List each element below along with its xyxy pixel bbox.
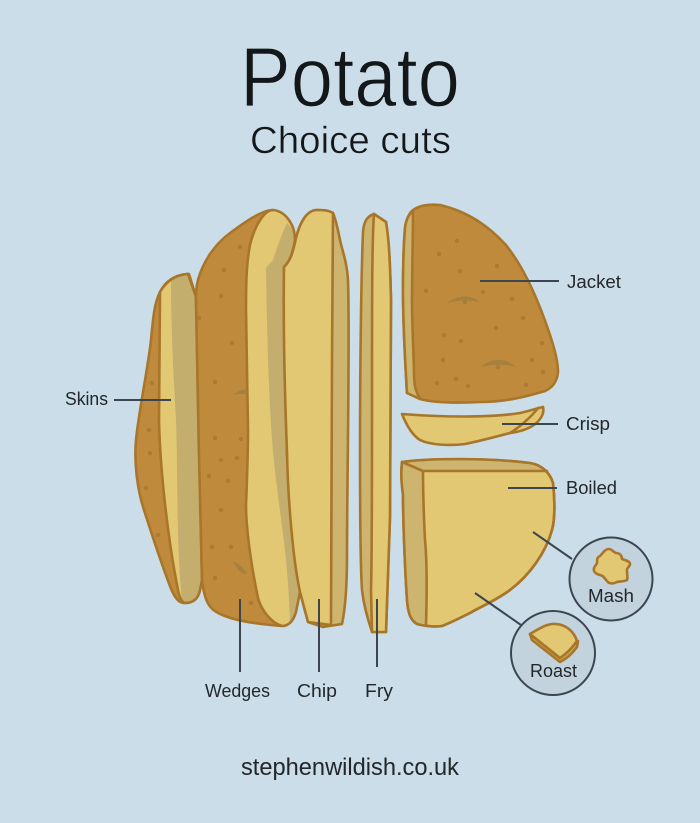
cut: chip [284,210,349,627]
label: wedges: Wedges [205,680,270,701]
label: roast: Roast [530,661,577,681]
icon: roast [530,624,578,662]
cut: boiled [401,459,554,626]
leader lines [114,281,572,672]
label: skins: Skins [65,388,108,409]
label: jacket: Jacket [567,271,621,292]
cut: skins [135,274,202,603]
callout: roast [511,611,595,695]
potato eye, bottom [481,360,516,367]
cut: crisp [402,407,543,445]
callout: mash [570,538,652,620]
label: boiled: Boiled [566,477,617,498]
label: mash: Mash [588,586,634,606]
label: fry: Fry [365,680,394,701]
potato eye, top [447,296,480,303]
cut: fry [360,214,391,632]
cut: jacket [403,205,558,403]
label: crisp: Crisp [566,413,610,434]
subtitle: Choice cuts [250,120,451,162]
title: Potato [240,30,460,124]
footer url: stephenwildish.co.uk [241,754,460,781]
icon: mash [594,549,630,583]
label: chip: Chip [297,680,337,701]
cut: wedges [196,210,300,626]
